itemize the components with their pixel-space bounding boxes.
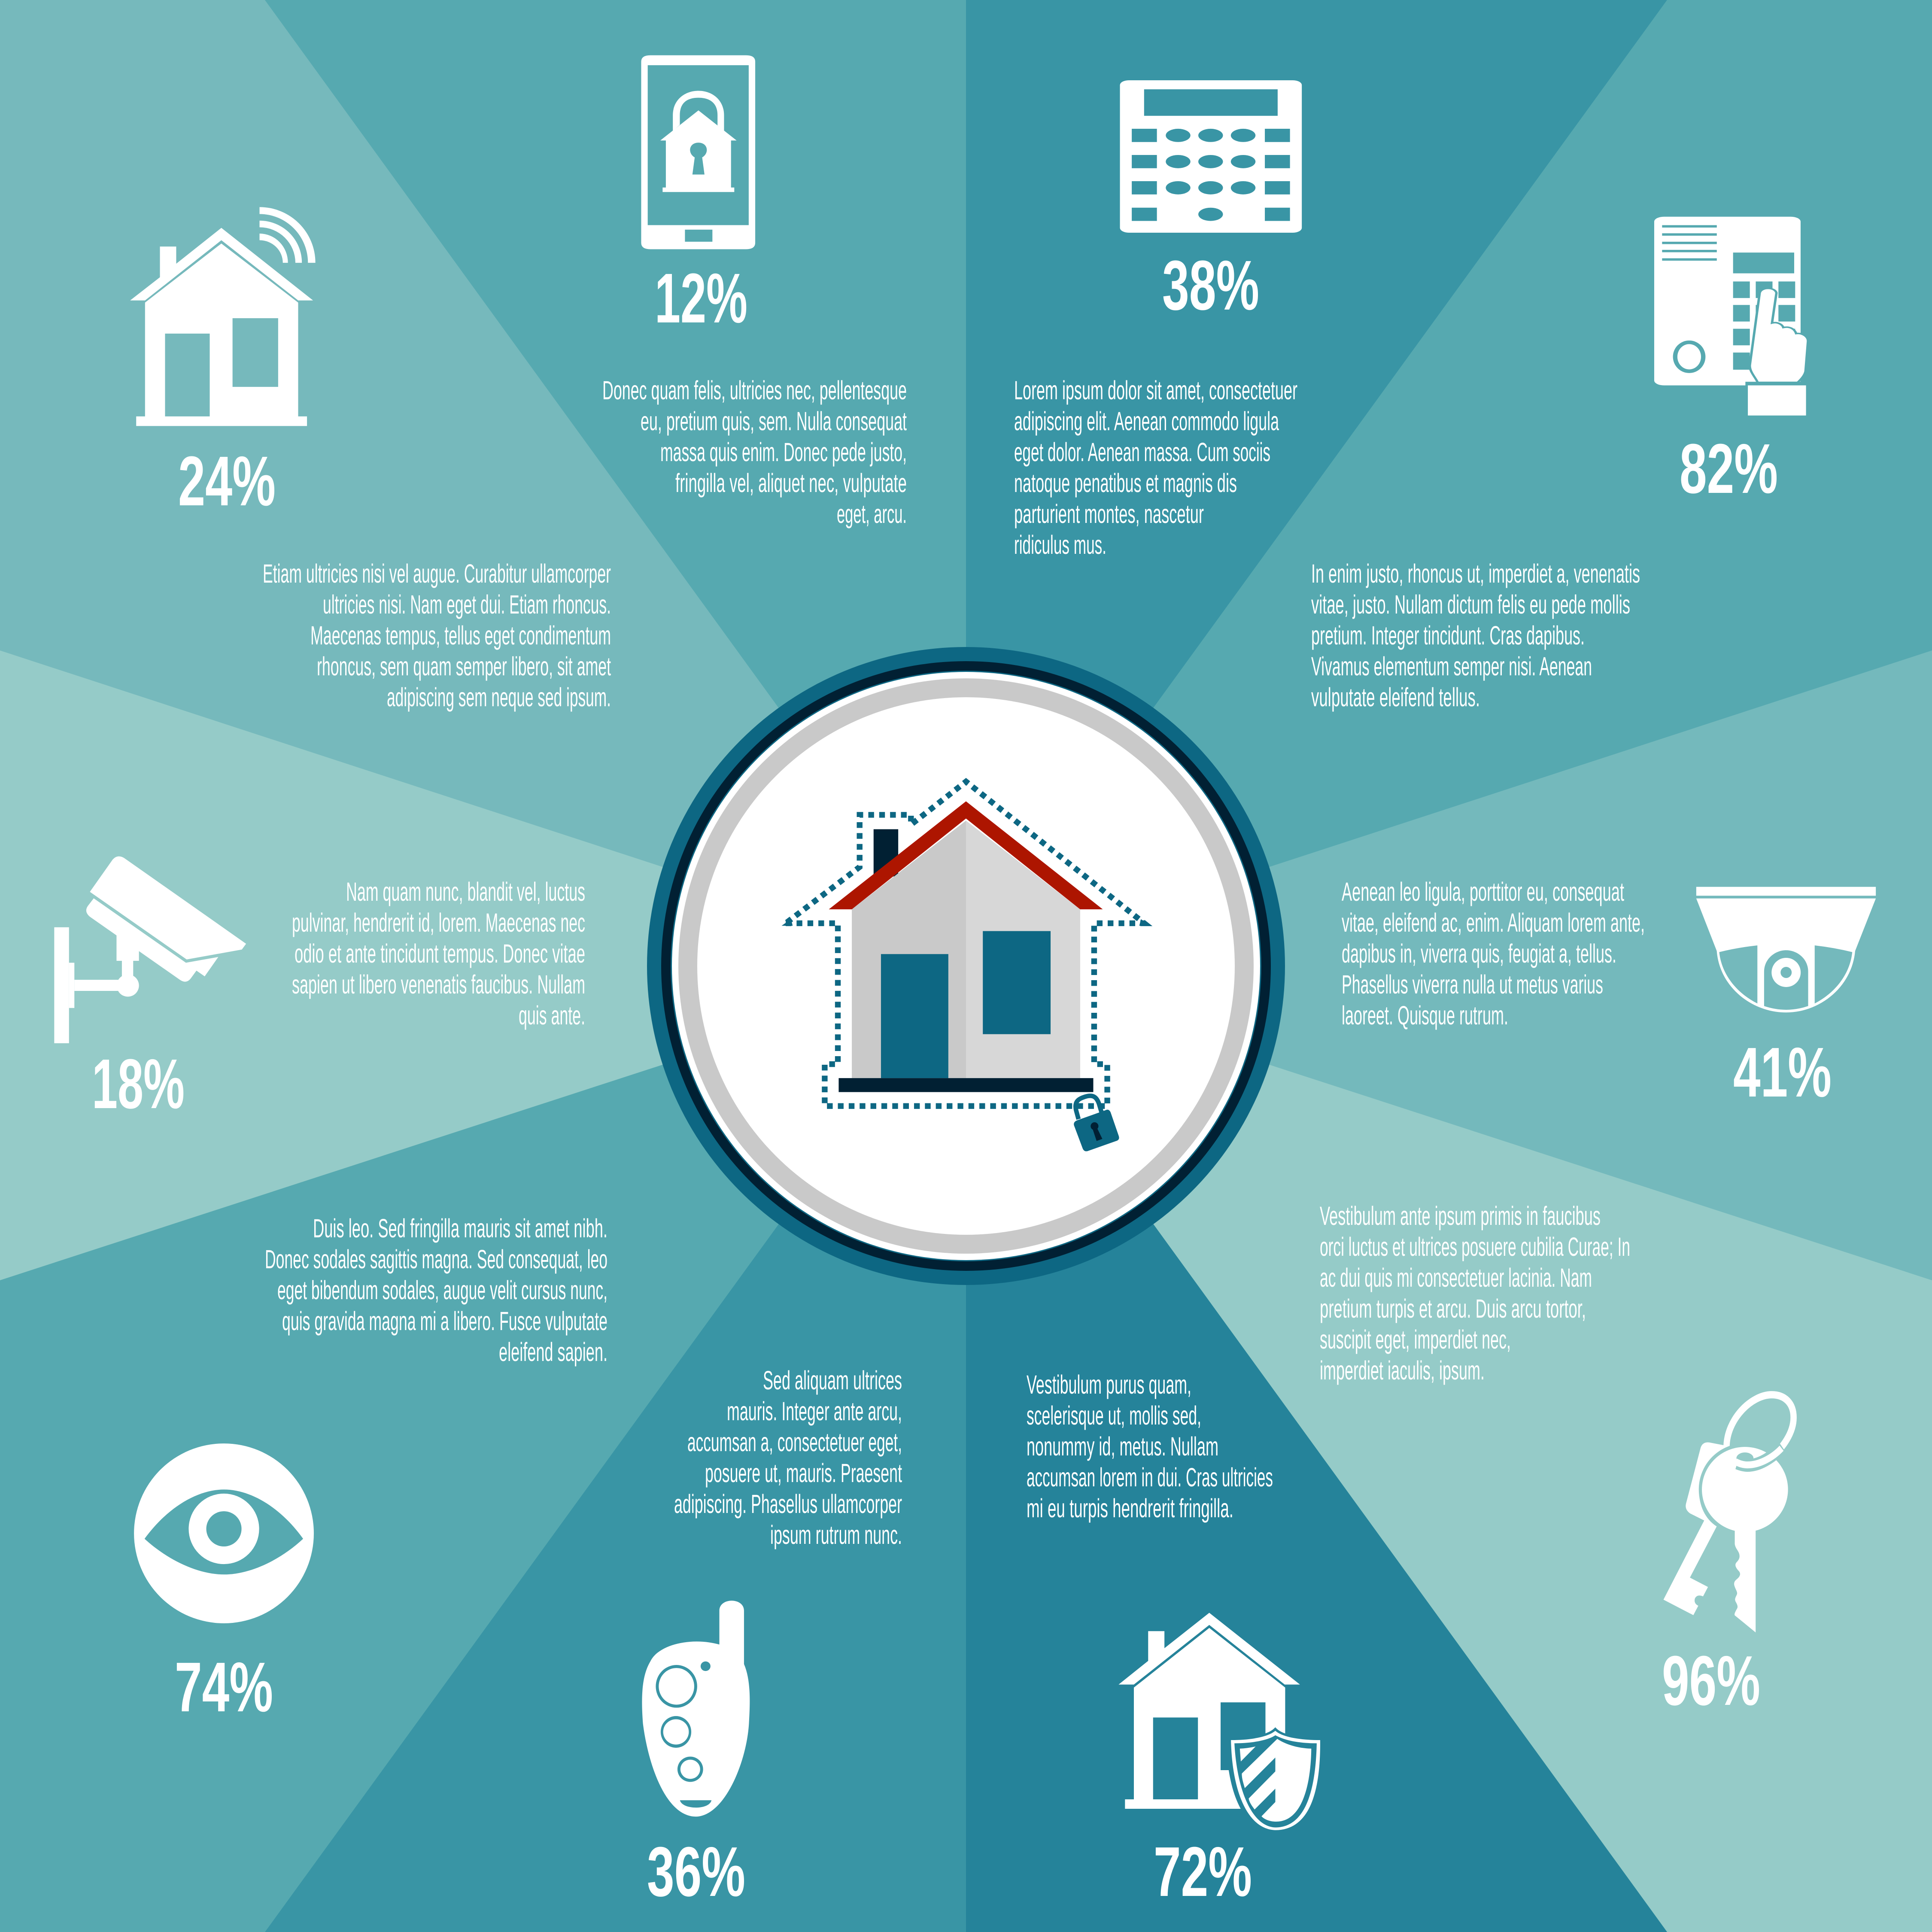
stat 41%: 41% <box>1733 1033 1832 1112</box>
panel: wedge 74% <box>0 966 966 1932</box>
icon: secured house <box>781 781 1150 1151</box>
text block: Vestibulum purus: scelerisque ut, mollis sed, <box>1027 1401 1201 1430</box>
stat 96%: 96% <box>1662 1641 1760 1720</box>
text block: In enim: vulputate eleifend tellus. <box>1311 683 1480 712</box>
icon: house with shield <box>1118 1613 1326 1833</box>
text block: Sed aliquam: ipsum rutrum nunc. <box>770 1520 902 1549</box>
text block: Donec: eget, arcu. <box>837 499 907 529</box>
text block: Duis leo <box>265 1214 608 1367</box>
text block: Aenean leo: Phasellus viverra nulla ut metus varius <box>1342 970 1603 999</box>
text block: Sed aliquam: posuere ut, mauris. Praesent <box>705 1458 902 1488</box>
panel: wedge 41% <box>966 650 1932 1280</box>
text block: Vestibulum ante <box>1320 1201 1630 1385</box>
stat 74%: 74% <box>175 1648 273 1726</box>
text block: Etiam: Etiam ultricies nisi vel augue. Curabitur ullamcorper <box>263 559 611 588</box>
text block: Etiam: ultricies nisi. Nam eget dui. Etiam rhoncus. <box>323 590 611 619</box>
panel: wedge 82% <box>966 0 1932 966</box>
text block: Duis leo: quis gravida magna mi a libero. Fusce vulputate <box>282 1306 608 1336</box>
stat 12%: 12% <box>655 259 747 337</box>
text block: Sed aliquam: mauris. Integer ante arcu, <box>727 1397 902 1426</box>
text block: In enim: In enim justo, rhoncus ut, imperdiet a, venenatis <box>1311 559 1640 588</box>
icon: padlock <box>1074 1096 1119 1151</box>
text block: Lorem: eget dolor. Aenean massa. Cum sociis <box>1014 437 1270 467</box>
text block: In enim: Vivamus elementum semper nisi. Aenean <box>1311 652 1592 681</box>
text block: Lorem: parturient montes, nascetur <box>1014 499 1204 529</box>
text block: Sed aliquam: accumsan a, consectetuer eget, <box>687 1428 902 1457</box>
text block: Vestibulum ante: orci luctus et ultrices posuere cubilia Curae; In <box>1320 1232 1630 1261</box>
text block: Vestibulum purus: nonummy id, metus. Nullam <box>1027 1432 1218 1461</box>
text block: Duis leo: eleifend sapien. <box>499 1337 608 1367</box>
text block: Duis leo: Duis leo. Sed fringilla mauris sit amet nibh. <box>313 1214 608 1243</box>
icon: eye in circle <box>134 1443 314 1623</box>
stat 82%: 82% <box>1680 429 1778 508</box>
text block: Vestibulum ante: Vestibulum ante ipsum primis in faucibus <box>1320 1201 1601 1230</box>
text block: Etiam: adipiscing sem neque sed ipsum. <box>387 683 611 712</box>
text block: Nam quam: quis ante. <box>519 1001 585 1030</box>
stat 18%: 18% <box>92 1045 185 1123</box>
icon: security panel with hand <box>1654 217 1808 416</box>
text block: Donec: massa quis enim. Donec pede justo, <box>660 437 907 467</box>
text block: Vestibulum purus: Vestibulum purus quam, <box>1027 1370 1191 1399</box>
central badge with house <box>647 647 1285 1285</box>
text block: Lorem <box>1014 376 1297 559</box>
text block: Sed aliquam: adipiscing. Phasellus ullamcorper <box>674 1489 902 1519</box>
stat 24%: 24% <box>178 442 276 520</box>
text block: Duis leo: eget bibendum sodales, augue velit cursus nunc, <box>277 1276 608 1305</box>
text block: Donec: fringilla vel, aliquet nec, vulputate <box>675 468 907 498</box>
text block: Aenean leo: dapibus in, viverra quis, feugiat a, tellus. <box>1342 939 1616 968</box>
icon: wall-mounted CCTV camera <box>54 857 246 1043</box>
text block: Etiam: Maecenas tempus, tellus eget condimentum <box>310 621 611 650</box>
icon: alarm keypad <box>1120 80 1302 233</box>
text block: Donec <box>602 376 907 529</box>
text block: Vestibulum ante: imperdiet iaculis, ipsum. <box>1320 1356 1485 1385</box>
text block: Sed aliquam: Sed aliquam ultrices <box>763 1366 902 1395</box>
text block: Aenean leo <box>1342 877 1645 1030</box>
panel: wedge 24% <box>0 0 966 966</box>
icon: dome camera <box>1696 887 1876 1012</box>
text block: Lorem: Lorem ipsum dolor sit amet, consectetuer <box>1014 376 1297 405</box>
text block: Lorem: ridiculus mus. <box>1014 530 1106 559</box>
text block: Vestibulum purus <box>1027 1370 1273 1523</box>
icon: wifi house <box>130 207 316 426</box>
icon: keys on a ring <box>1664 1395 1794 1632</box>
text block: In enim: pretium. Integer tincidunt. Cras dapibus. <box>1311 621 1585 650</box>
panel: wedge 18% <box>0 650 966 1280</box>
percentages <box>92 246 1832 1911</box>
icon: remote control fob <box>642 1601 750 1817</box>
text block: Etiam: rhoncus, sem quam semper libero, sit amet <box>317 652 611 681</box>
text block: Aenean leo: Aenean leo ligula, porttitor eu, consequat <box>1342 877 1624 906</box>
panel: wedge 38% <box>966 0 1667 966</box>
text block: Sed aliquam <box>674 1366 902 1549</box>
icon: smartphone lock <box>641 55 755 249</box>
text block: In enim <box>1311 559 1640 712</box>
text block: Vestibulum ante: suscipit eget, imperdiet nec, <box>1320 1325 1511 1354</box>
text block: Nam quam: Nam quam nunc, blandit vel, luctus <box>346 877 585 906</box>
text block: Donec: Donec quam felis, ultricies nec, pellentesque <box>602 376 907 405</box>
text block: Nam quam <box>292 877 585 1030</box>
text block: Nam quam: pulvinar, hendrerit id, lorem. Maecenas nec <box>292 908 585 937</box>
panel: wedge 12% <box>265 0 966 966</box>
text block: Donec: eu, pretium quis, sem. Nulla consequat <box>641 407 907 436</box>
text block: Etiam <box>263 559 611 712</box>
text block: Vestibulum purus: mi eu turpis hendrerit fringilla. <box>1027 1494 1233 1523</box>
stat 72%: 72% <box>1154 1832 1252 1911</box>
text block: Duis leo: Donec sodales sagittis magna. Sed consequat, leo <box>265 1245 608 1274</box>
stat 36%: 36% <box>647 1832 745 1911</box>
text block: Vestibulum ante: pretium turpis et arcu. Duis arcu tortor, <box>1320 1294 1586 1323</box>
text block: Vestibulum purus: accumsan lorem in dui. Cras ultricies <box>1027 1463 1273 1492</box>
text block: Aenean leo: laoreet. Quisque rutrum. <box>1342 1001 1508 1030</box>
text block: Vestibulum ante: ac dui quis mi consectetuer lacinia. Nam <box>1320 1263 1592 1292</box>
panel: wedge 96% <box>966 966 1932 1932</box>
stat 38%: 38% <box>1162 246 1259 325</box>
panel: wedge 72% <box>966 966 1667 1932</box>
text block: Nam quam: sapien ut libero venenatis faucibus. Nullam <box>292 970 585 999</box>
text block: Lorem: adipiscing elit. Aenean commodo ligula <box>1014 407 1279 436</box>
text block: Aenean leo: vitae, eleifend ac, enim. Aliquam lorem ante, <box>1342 908 1645 937</box>
text block: In enim: vitae, justo. Nullam dictum felis eu pede mollis <box>1311 590 1630 619</box>
text block: Lorem: natoque penatibus et magnis dis <box>1014 468 1237 498</box>
panel: wedge 36% <box>265 966 966 1932</box>
text block: Nam quam: odio et ante tincidunt tempus. Donec vitae <box>295 939 585 968</box>
